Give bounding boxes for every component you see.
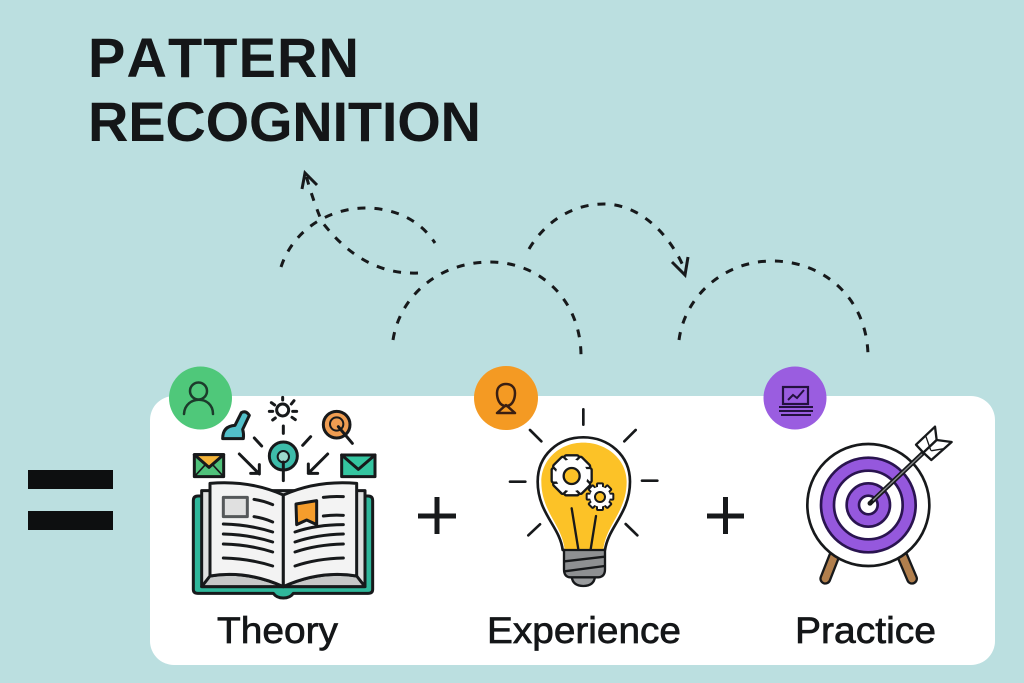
large gear — [552, 455, 592, 495]
target stand legs — [825, 557, 912, 579]
small gear — [587, 483, 613, 510]
book cover — [193, 496, 373, 598]
arrows into the book — [239, 426, 328, 474]
arrow shaft — [870, 453, 923, 503]
badge: orange idea — [474, 366, 538, 430]
right envelope — [342, 455, 375, 477]
labels: Theory — [217, 610, 339, 651]
page picture — [223, 497, 247, 517]
labels — [217, 610, 936, 651]
plus sign two — [707, 497, 744, 534]
bulb rays — [510, 409, 657, 535]
book bottom edge — [202, 574, 365, 587]
labels: Experience — [487, 610, 681, 651]
icon: light bulb with gears — [510, 409, 657, 586]
plus sign one — [418, 497, 456, 534]
bulb yellow fill — [541, 443, 627, 549]
center pin icon — [269, 442, 297, 481]
dashed looping arrows — [281, 173, 868, 357]
brush icon — [223, 412, 249, 439]
page text lines — [223, 496, 343, 566]
labels: Practice — [795, 610, 936, 651]
title: PATTERN — [88, 26, 359, 89]
arrow fletching — [916, 427, 952, 460]
title — [88, 26, 481, 153]
right page — [283, 483, 357, 587]
magnifier target icon — [323, 411, 352, 443]
arrow tip — [868, 501, 872, 506]
bulb glass — [538, 437, 630, 550]
icon: open book with ideas — [193, 397, 375, 598]
panel: white card — [150, 396, 995, 665]
sun icon — [269, 397, 297, 420]
equals sign — [28, 470, 113, 530]
badge: purple laptop — [764, 366, 826, 430]
title: RECOGNITION — [88, 90, 481, 153]
target rings — [807, 444, 929, 566]
bulb screw base — [564, 550, 605, 586]
left envelope — [194, 455, 224, 477]
book page stack — [202, 491, 365, 587]
bulb filaments — [572, 508, 596, 549]
bookmark — [296, 501, 317, 525]
icon: target with arrow — [807, 427, 952, 579]
badge: green person — [169, 366, 232, 430]
left page — [210, 483, 283, 587]
